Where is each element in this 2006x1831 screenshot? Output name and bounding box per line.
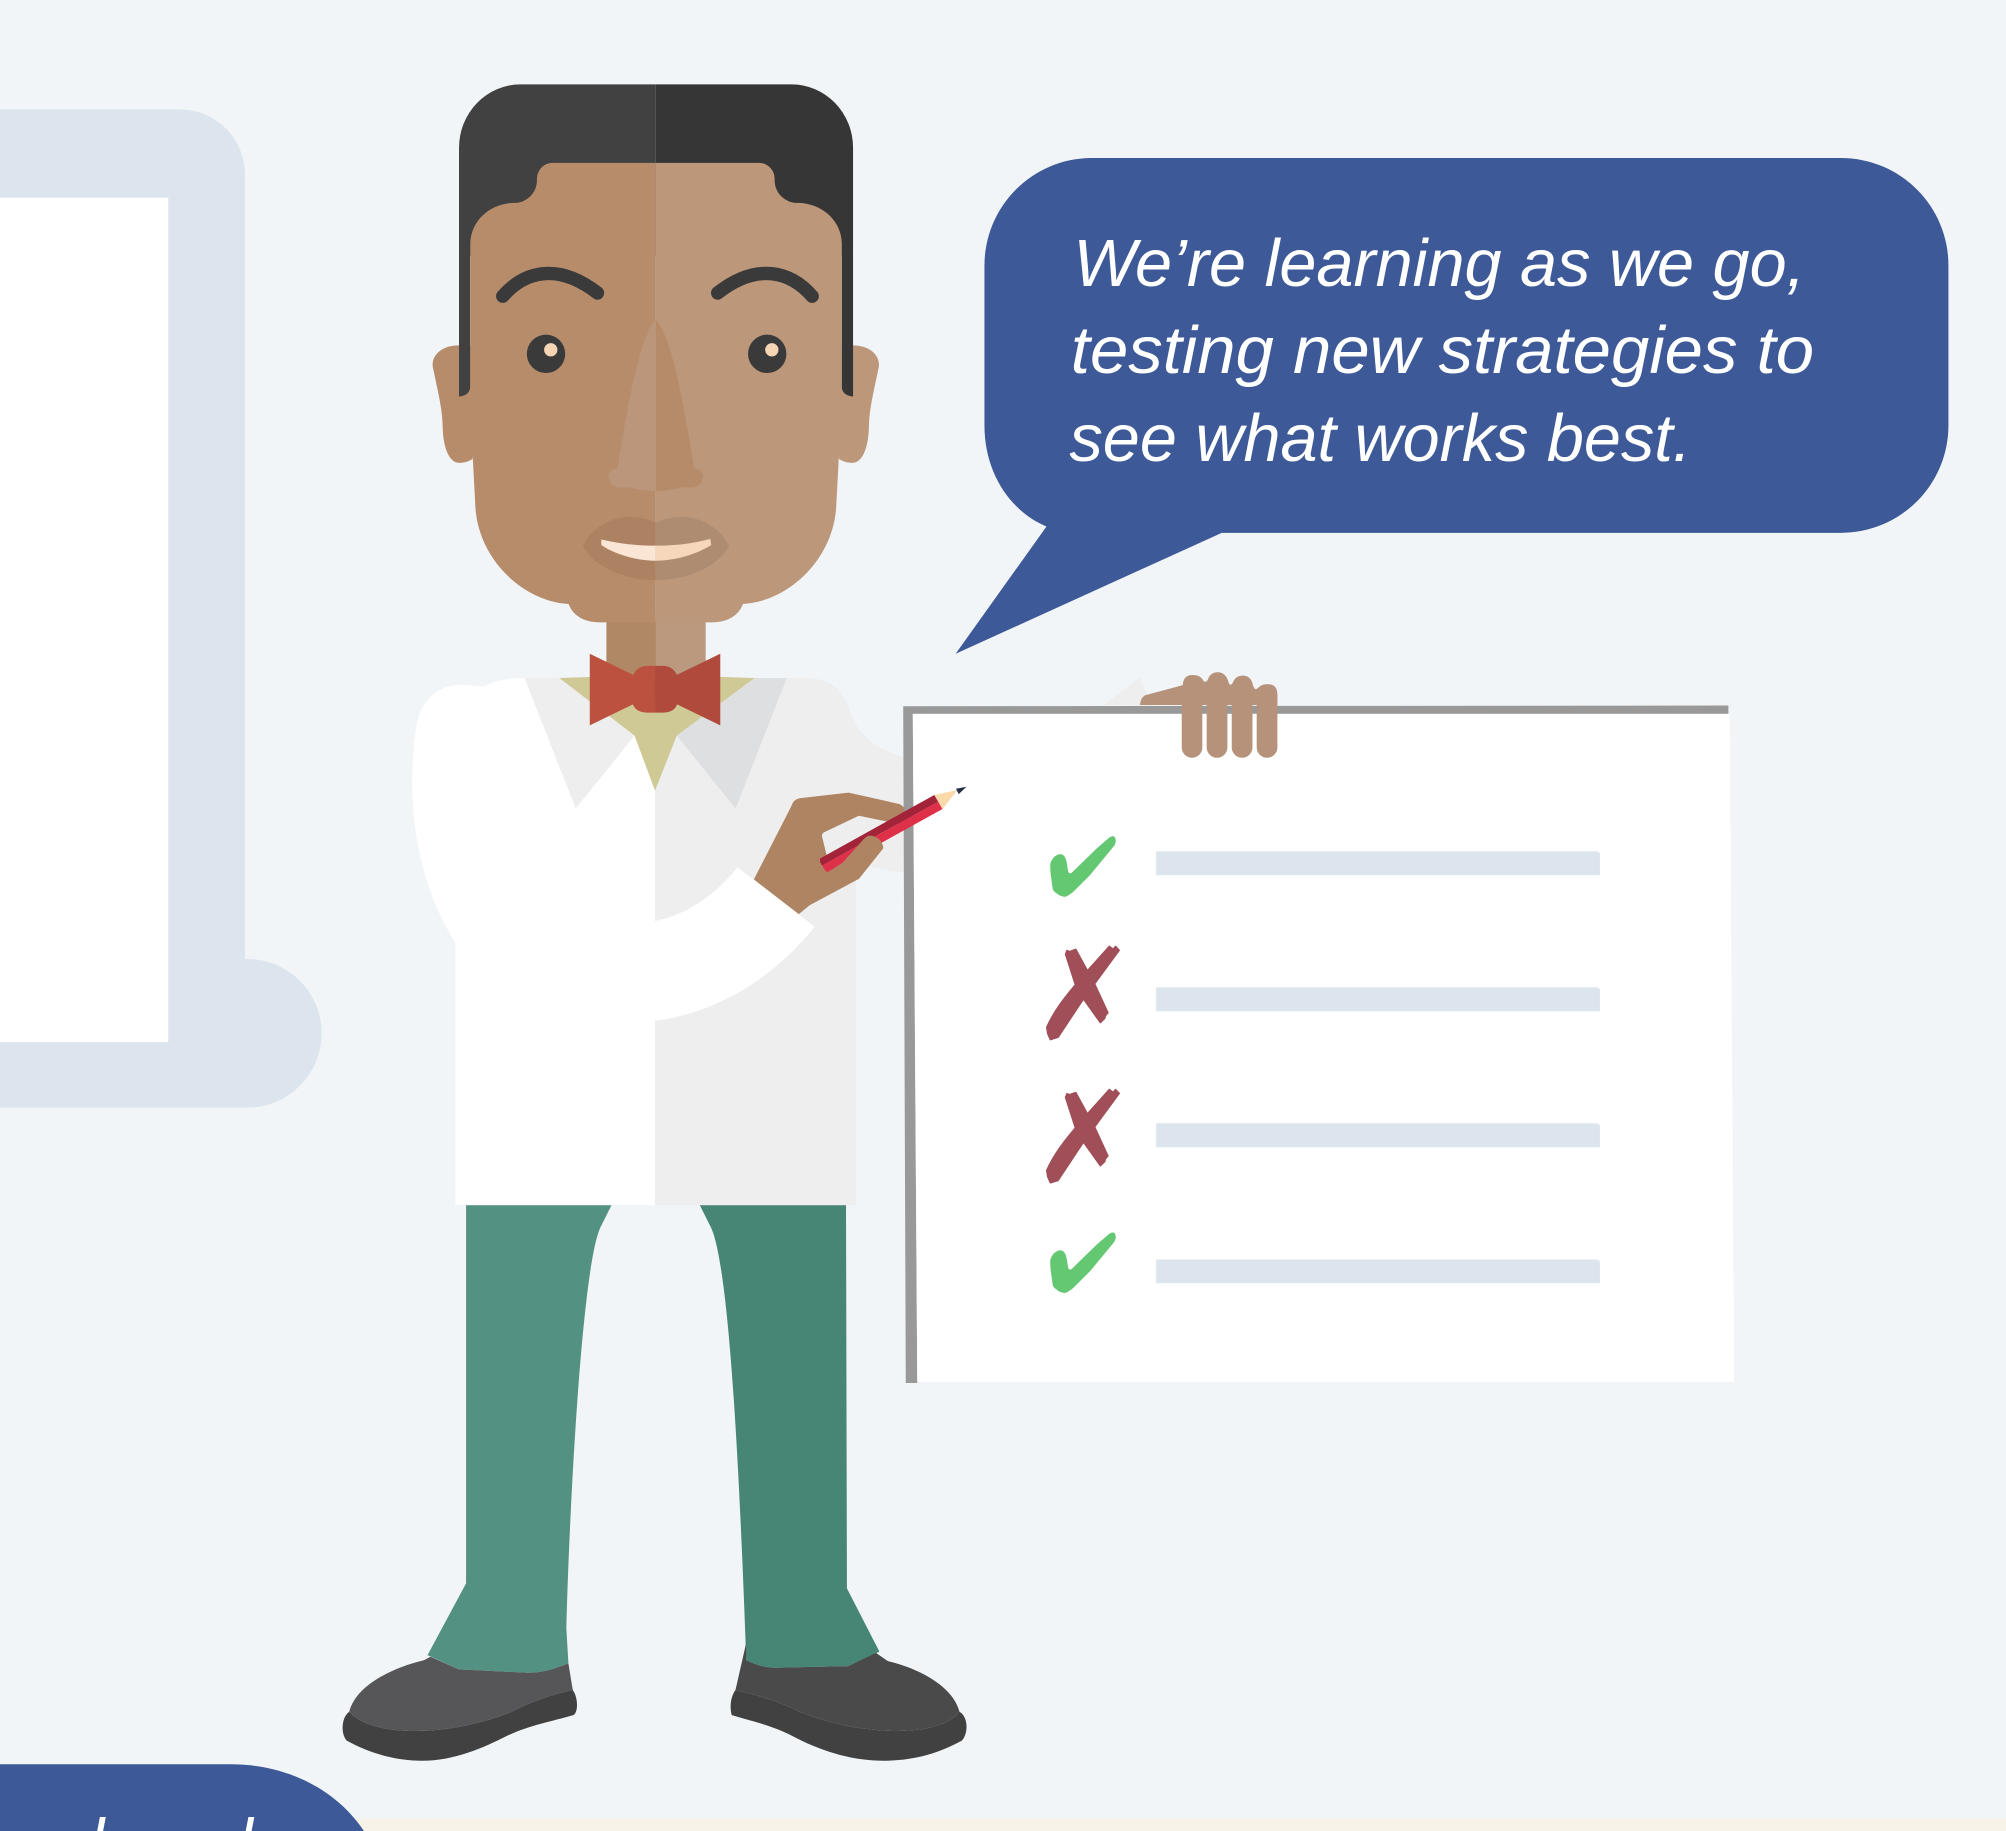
neck	[606, 619, 706, 683]
panel: cream strip at bottom	[345, 1819, 2006, 1831]
hand holding pencil	[754, 787, 967, 914]
mouth	[583, 517, 729, 580]
collar and shirt	[525, 675, 787, 809]
hair	[459, 84, 853, 397]
bow tie	[590, 654, 720, 725]
sleeve	[655, 867, 815, 1021]
checklist bar 1	[1156, 851, 1600, 875]
icon: check mark 1	[1050, 836, 1116, 897]
eyebrows	[503, 273, 812, 296]
checklist bar 2	[1156, 987, 1600, 1011]
speech text	[1070, 227, 1814, 476]
callout: speech bubble	[956, 158, 1948, 654]
trousers	[428, 1205, 879, 1673]
thumb	[829, 836, 883, 885]
icon: cross mark 1	[1047, 946, 1119, 1040]
eyes	[527, 335, 786, 373]
nose	[609, 320, 703, 491]
icon: cross mark 2	[1047, 1089, 1119, 1183]
character: presenter	[343, 84, 1151, 1761]
icon: check mark 2	[1050, 1232, 1116, 1293]
icon: pencil	[820, 787, 967, 872]
checklist bar 4	[1156, 1260, 1600, 1283]
ears	[433, 345, 879, 463]
face	[470, 163, 842, 622]
hand gripping board	[1140, 672, 1277, 758]
right shoe	[731, 1643, 967, 1761]
speech text: We’re learning as we go,	[1073, 227, 1805, 301]
speech text: testing new strategies to	[1071, 314, 1814, 388]
checklist bar 3	[1156, 1123, 1600, 1147]
panel: cropped document frame	[0, 109, 322, 1108]
lab coat body	[412, 677, 1151, 1205]
callout: cropped lower speech bubble	[0, 1764, 365, 1831]
left shoe	[343, 1657, 577, 1761]
panel: checklist board	[903, 706, 1734, 1383]
speech text: see what works best.	[1070, 402, 1691, 476]
